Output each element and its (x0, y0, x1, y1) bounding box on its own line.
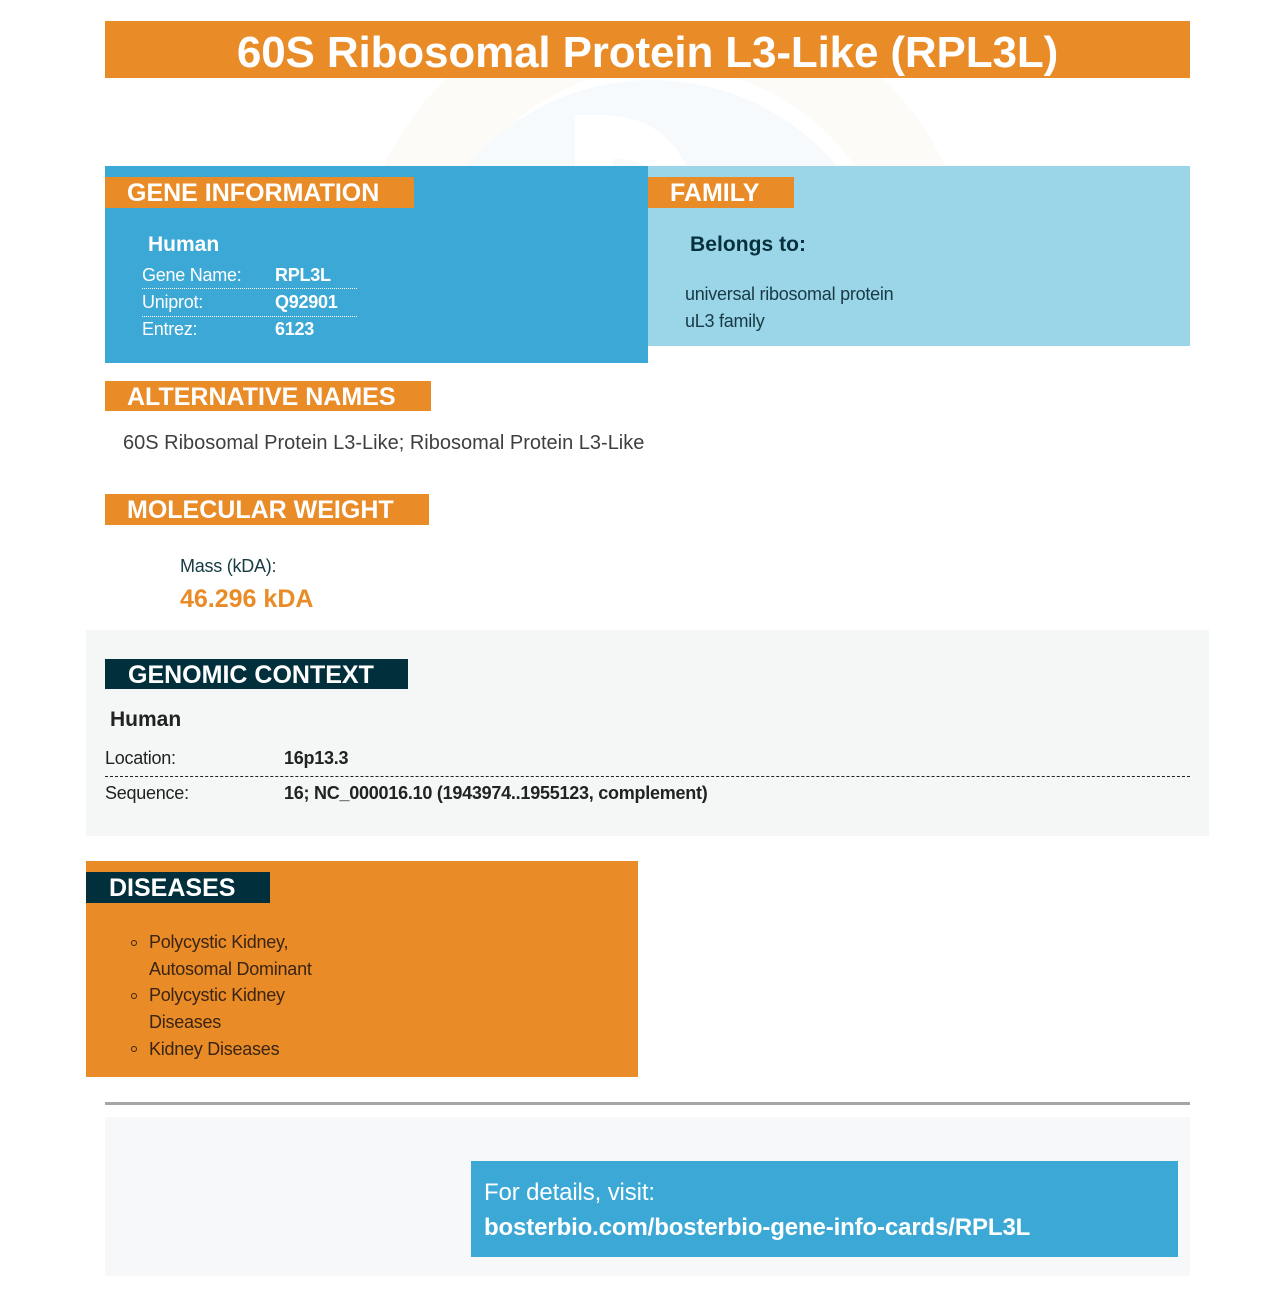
footer panel (105, 1117, 1190, 1276)
sequence row: 16; NC_000016.10 (1943974..1955123, complement) (284, 783, 708, 803)
diseases list: Autosomal Dominant (149, 959, 312, 979)
diseases list: Kidney Diseases (149, 1039, 279, 1059)
location row (105, 748, 1190, 777)
alternative names text: 60S Ribosomal Protein L3-Like; Ribosomal Protein L3-Like (123, 432, 644, 454)
title banner (105, 21, 1190, 78)
heading: molecular weight: MOLECULAR WEIGHT (127, 496, 394, 524)
heading: genomic context: GENOMIC CONTEXT (128, 661, 374, 689)
panel: gene information (105, 166, 648, 363)
gene details table: Q92901 (275, 292, 338, 312)
callout: details link (471, 1161, 1178, 1257)
heading: diseases: DISEASES (109, 874, 235, 902)
belongs to label: Belongs to: (690, 233, 806, 256)
callout: details link: For details, visit: (484, 1179, 655, 1206)
watermark logo (468, 80, 836, 166)
sequence row: Sequence: (105, 783, 189, 803)
gene details table: 6123 (275, 319, 314, 339)
diseases list: Polycystic Kidney (149, 985, 285, 1005)
gene details table (142, 265, 357, 339)
heading: family (648, 177, 794, 208)
callout: details link: bosterbio.com/bosterbio-gene-info-cards/RPL3L (484, 1214, 1030, 1241)
gene details table: Gene Name: (142, 265, 242, 285)
gene details table: RPL3L (275, 265, 331, 285)
panel: diseases (86, 861, 638, 1077)
mass value: 46.296 kDA (180, 585, 313, 613)
panel: genomic context (86, 630, 1209, 836)
panel: family (648, 166, 1190, 346)
family text: universal ribosomal protein (685, 284, 893, 304)
diseases list: Polycystic Kidney, (149, 932, 288, 952)
family text: uL3 family (685, 311, 765, 331)
species label: Human (148, 233, 219, 256)
heading: alternative names: ALTERNATIVE NAMES (127, 383, 396, 411)
gene details table: Uniprot: (142, 292, 203, 312)
heading: diseases (86, 872, 270, 903)
title: 60S Ribosomal Protein L3-Like (RPL3L) (237, 28, 1058, 77)
location row: Location: (105, 748, 176, 768)
heading: gene information: GENE INFORMATION (127, 179, 379, 207)
mass label: Mass (kDA): (180, 556, 276, 576)
gene details table: Entrez: (142, 319, 197, 339)
location row: 16p13.3 (284, 748, 348, 768)
heading: family: FAMILY (670, 179, 759, 207)
family text (685, 284, 893, 331)
species label: Human (110, 708, 181, 731)
diseases list: Diseases (149, 1012, 221, 1032)
diseases list (131, 932, 312, 1059)
